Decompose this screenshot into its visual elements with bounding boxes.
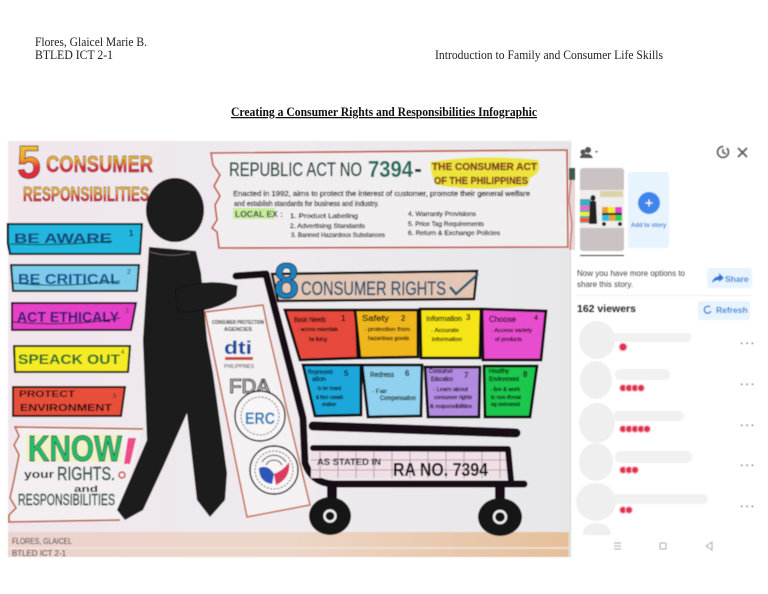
right 6: redress: Redress <box>370 372 394 379</box>
responsibility 5: protect environment <box>13 387 125 416</box>
right 1: basic needs: - access essentials <box>298 327 338 333</box>
shopping cart frame <box>236 274 524 497</box>
icon: story history <box>718 146 728 158</box>
responsibility 2: be critical: 2 <box>127 269 131 276</box>
author signature <box>12 537 72 558</box>
viewer row 5: ... <box>739 500 755 510</box>
cart wheels <box>309 497 522 536</box>
viewer row 3 <box>579 403 755 443</box>
viewer row 4: ... <box>739 459 755 469</box>
story thumbnail <box>580 168 624 251</box>
responsibility 2: be critical <box>11 265 139 291</box>
right 3: information: 3 <box>466 313 471 322</box>
right 3: information <box>420 309 481 358</box>
republic act 7394 panel: 3. Banned Hazardous Substances <box>291 232 386 239</box>
cart label: as stated in RA no. 7394: AS STATED IN <box>317 457 381 467</box>
callout: know your rights and responsibilities: and <box>74 484 98 494</box>
right 2: safety: hazardous goods <box>368 336 409 342</box>
right 8: healthy environment: Environment <box>489 377 519 383</box>
republic act 7394 panel: Enacted in 1992, aims to protect the interest of customer, promote their general welfare <box>233 191 530 198</box>
right 4: choose <box>482 309 546 360</box>
republic act 7394 panel: 2. Advertising Standards <box>290 223 366 230</box>
callout: know your rights and responsibilities: your <box>24 469 55 481</box>
viewer row 6 partial <box>583 523 611 535</box>
viewer row 1 <box>579 321 755 359</box>
right 8: healthy environment: - live & work <box>490 387 521 393</box>
document header: student name and section <box>35 35 147 62</box>
right 8: healthy environment: -ing environment <box>490 402 520 408</box>
heading: 5 consumer responsibilities: RESPONSIBILITIES <box>23 184 149 206</box>
heading: 5 consumer responsibilities: CONSUMER <box>46 151 153 177</box>
responsibility 5: protect environment: ENVIRONMENT <box>20 403 112 414</box>
right 1: basic needs: for living <box>309 337 327 343</box>
agency logo: FDA: FDA <box>229 376 271 398</box>
right 6: redress: 6 <box>405 369 410 378</box>
heading: 5 consumer responsibilities: 5 <box>17 136 41 188</box>
agency logo: telecommunications commission <box>250 446 298 494</box>
agencies tag: CONSUMER PROTECTION <box>212 320 264 326</box>
viewer row 3: ... <box>739 419 755 429</box>
right 7: consumer education: consumer rights <box>434 395 473 401</box>
right 4: choose: of products <box>495 337 522 343</box>
document title: Creating a Consumer Rights and Responsibilities Infographic <box>231 105 537 119</box>
responsibility 4: speak out <box>14 346 130 372</box>
refresh button: Refresh <box>716 305 748 315</box>
author signature: BTLED ICT 2-1 <box>12 549 67 558</box>
social story viewers panel <box>569 141 755 557</box>
right 7: consumer education: 7 <box>464 371 469 380</box>
right 4: choose: - Access variety <box>491 328 532 334</box>
8 consumer rights banner <box>272 253 478 309</box>
share button <box>707 268 752 288</box>
responsibility 5: protect environment: PROTECT <box>19 389 76 399</box>
viewer row 2: ... <box>739 378 755 388</box>
right 7: consumer education: & responsibilities <box>430 404 473 410</box>
document header: student name and section: BTLED ICT 2-1 <box>35 48 113 62</box>
callout: know your rights and responsibilities: RESPONSIBILITIES <box>18 492 115 509</box>
viewer row 4 <box>579 443 755 481</box>
viewer count: 162 viewers <box>577 303 636 315</box>
right 7: consumer education: Education <box>431 377 453 383</box>
wooden table edge <box>8 532 569 557</box>
document header: course name: Introduction to Family and Consumer Life Skills <box>435 48 663 62</box>
add to story card <box>628 172 669 248</box>
right 5: representation: & their consid- <box>316 395 344 401</box>
right 7: consumer education: Consumer <box>429 369 453 375</box>
8 consumer rights banner: 8 <box>274 253 299 309</box>
8 consumer rights banner: CONSUMER RIGHTS <box>301 279 446 300</box>
share prompt text: Now you have more options to <box>577 268 685 278</box>
right 5: representation <box>303 365 361 416</box>
hand-drawn poster <box>8 136 569 558</box>
agencies tag: AGENCIES <box>224 327 252 333</box>
republic act 7394 panel: 7394 <box>368 156 413 182</box>
responsibility 3: act ethically <box>12 303 136 330</box>
right 8: healthy environment: in non-threat <box>491 395 522 401</box>
person pushing cart <box>117 178 237 520</box>
right 4: choose: Choose <box>489 315 517 324</box>
right 5: representation: eration <box>322 402 336 408</box>
right 1: basic needs <box>285 310 358 360</box>
republic act 7394 panel <box>211 150 568 248</box>
republic act 7394 panel: 5. Price Tag Requirements <box>408 221 485 228</box>
share button: Share <box>725 274 749 284</box>
add to story card: Add to story <box>631 223 667 229</box>
responsibility 2: be critical: BE CRITICAL <box>18 271 120 288</box>
author signature: FLORES, GLAICEL <box>12 537 72 546</box>
right 6: redress: Compensation <box>380 396 416 402</box>
agency logo: DTI: dti <box>224 338 252 358</box>
right 5: representation: ation <box>312 377 326 383</box>
heading: 5 consumer responsibilities <box>17 136 153 206</box>
right 3: information: Information <box>426 316 462 323</box>
responsibility 3: act ethically: 3 <box>125 308 129 315</box>
icon: close <box>738 148 747 157</box>
right 6: redress: - Fair <box>372 389 387 395</box>
agencies tag <box>205 305 310 517</box>
responsibility 1: be aware: BE AWARE <box>14 230 112 246</box>
right 7: consumer education <box>425 367 480 417</box>
right 8: healthy environment <box>484 366 537 417</box>
icon: audience <box>580 147 598 158</box>
right 6: redress <box>362 365 422 417</box>
responsibility 4: speak out: SPEACK OUT <box>18 351 120 367</box>
android navigation bar <box>614 542 712 550</box>
responsibility 1: be aware: 1 <box>129 229 134 238</box>
responsibility 1: be aware <box>8 224 142 254</box>
share prompt text <box>577 268 685 289</box>
viewer row 2 <box>580 361 755 399</box>
document header: student name and section: Flores, Glaicel Marie B. <box>35 35 147 49</box>
right 2: safety: 2 <box>401 314 406 323</box>
republic act 7394 panel: and establish standards for business and industry. <box>234 201 379 208</box>
cart label: as stated in RA no. 7394: RA NO. 7394 <box>393 460 488 480</box>
right 2: safety <box>355 310 418 358</box>
right 3: information: - Accurate <box>431 328 459 334</box>
viewer row 5 <box>576 483 755 521</box>
agency logo: ERC <box>235 391 285 441</box>
republic act 7394 panel: OF THE PHILIPPINES <box>434 176 528 187</box>
right 1: basic needs: Basic Needs <box>294 317 326 324</box>
right 2: safety: Safety <box>362 314 389 323</box>
share prompt text: share this story. <box>577 279 633 289</box>
right 7: consumer education: - Learn about <box>433 387 469 393</box>
right 2: safety: - protection from <box>364 327 410 333</box>
right 4: choose: 4 <box>534 315 538 322</box>
agency logo: DTI <box>224 338 255 370</box>
republic act 7394 panel: LOCAL EX : <box>235 210 283 219</box>
right 5: representation: 5 <box>344 369 349 378</box>
right 1: basic needs: 1 <box>341 314 346 323</box>
right 8: healthy environment: Healthy <box>489 369 509 375</box>
republic act 7394 panel: 1. Product Labeling <box>290 213 358 220</box>
republic act 7394 panel: THE CONSUMER ACT <box>432 162 537 173</box>
agency logo: DTI: PHILIPPINES <box>224 364 255 370</box>
right 5: representation: Represent- <box>308 370 334 376</box>
right 8: healthy environment: 8 <box>523 370 528 379</box>
cart label: as stated in RA no. 7394 <box>317 457 488 480</box>
callout: know your rights and responsibilities <box>9 427 143 522</box>
responsibility 3: act ethically: ACT ETHICALY <box>17 309 119 326</box>
callout: know your rights and responsibilities: RIGHTS. <box>57 464 115 484</box>
republic act 7394 panel: 4. Warranty Provisions <box>408 211 477 218</box>
republic act 7394 panel: REPUBLIC ACT NO <box>229 160 362 181</box>
responsibility 4: speak out: 4 <box>121 350 125 356</box>
republic act 7394 panel: 6. Return & Exchange Policies <box>408 230 501 237</box>
responsibility 5: protect environment: 5 <box>113 394 117 400</box>
viewer row 1: ... <box>739 337 755 347</box>
callout: know your rights and responsibilities: KNOW <box>28 428 122 469</box>
right 5: representation: - to be heard <box>315 386 341 392</box>
agency logo: ERC: ERC <box>245 409 275 428</box>
refresh button <box>698 301 750 320</box>
right 3: information: information <box>432 337 462 343</box>
